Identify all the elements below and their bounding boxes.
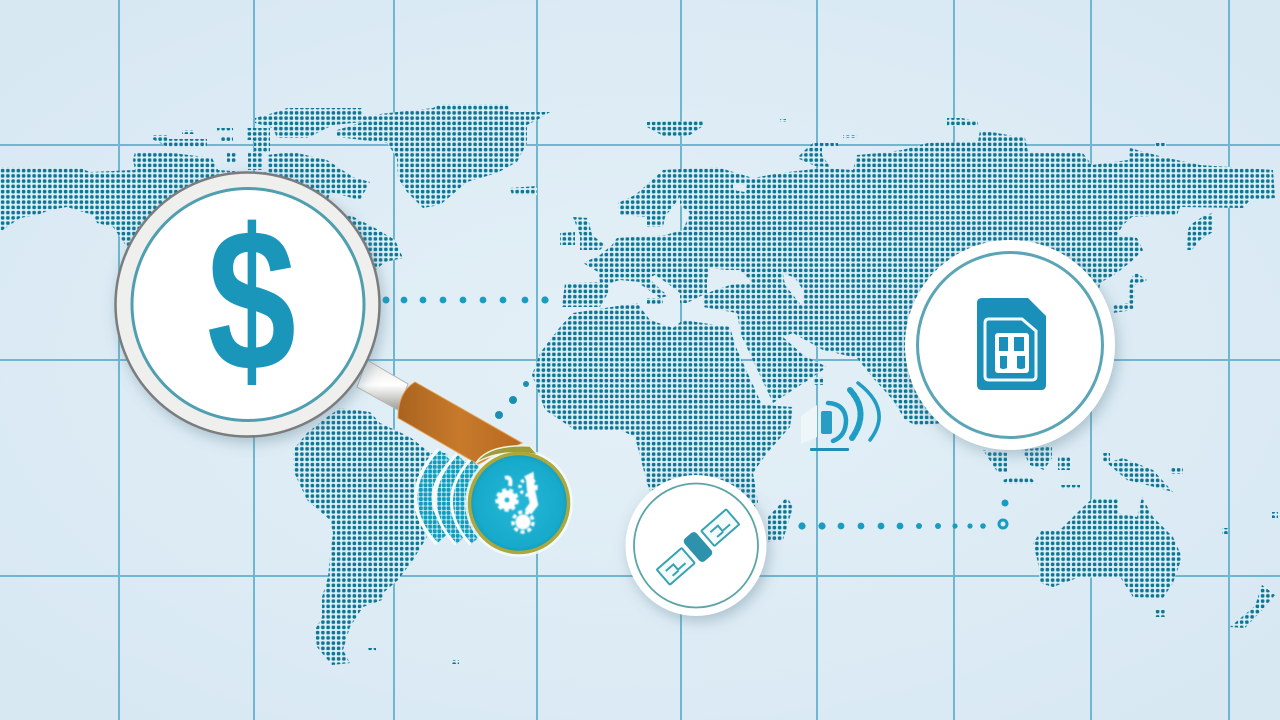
gears icon xyxy=(497,478,536,532)
metal neck xyxy=(357,360,408,410)
inner ring xyxy=(634,484,758,608)
dotted connector: satellite to Indonesia xyxy=(798,500,1008,530)
inner ring xyxy=(918,252,1102,438)
circle base xyxy=(626,475,766,616)
gear ball xyxy=(465,446,573,557)
Tasmania and New Zealand xyxy=(1155,512,1278,628)
Indonesia islands xyxy=(983,446,1080,489)
New Guinea xyxy=(1103,453,1183,492)
United Kingdom and Ireland xyxy=(560,217,605,250)
Philippines and south-east coast islands xyxy=(1113,272,1147,313)
Eurasia xyxy=(562,130,1275,425)
card body xyxy=(977,298,1046,390)
ball halo xyxy=(465,449,573,557)
Africa xyxy=(532,303,793,580)
circle base xyxy=(905,240,1115,450)
Falkland dots xyxy=(368,648,459,664)
signal antenna icon xyxy=(801,383,879,451)
dotted world map xyxy=(0,104,1278,665)
Arctic islands xyxy=(152,128,270,170)
chip contacts xyxy=(999,337,1025,369)
ball face xyxy=(470,454,568,552)
Italy and Sicily xyxy=(640,276,668,304)
satellite circle xyxy=(626,475,766,616)
magnifying glass xyxy=(116,172,522,464)
antenna base line xyxy=(810,448,849,451)
Svalbard and Novaya Zemlya xyxy=(647,119,857,167)
ball cap xyxy=(476,446,538,463)
wave arcs xyxy=(828,383,879,441)
Madagascar xyxy=(768,497,793,542)
Greenland xyxy=(255,104,550,208)
antenna body xyxy=(801,405,817,444)
antenna core xyxy=(821,411,832,434)
card inner outline xyxy=(985,319,1036,380)
wooden handle xyxy=(398,382,522,464)
dotted connector: gear ball to Africa xyxy=(495,381,529,419)
lens body xyxy=(116,172,380,436)
Socotra xyxy=(813,377,823,385)
Iceland xyxy=(510,186,537,195)
signal arcs near gear ball xyxy=(424,455,477,539)
dotted connector: lens to Africa xyxy=(382,296,549,304)
Japan and Sakhalin xyxy=(1187,213,1213,250)
lens glass xyxy=(132,188,364,420)
SIM card circle xyxy=(905,240,1115,450)
North America xyxy=(0,152,403,340)
South America xyxy=(293,408,450,665)
icon: SIM card xyxy=(977,298,1046,390)
icon: satellite xyxy=(654,506,742,588)
Australia xyxy=(1033,497,1182,598)
Severnaya Zemlya and Siberian islands xyxy=(947,118,1166,147)
chip xyxy=(995,333,1029,373)
dollar symbol: $ xyxy=(207,187,296,413)
